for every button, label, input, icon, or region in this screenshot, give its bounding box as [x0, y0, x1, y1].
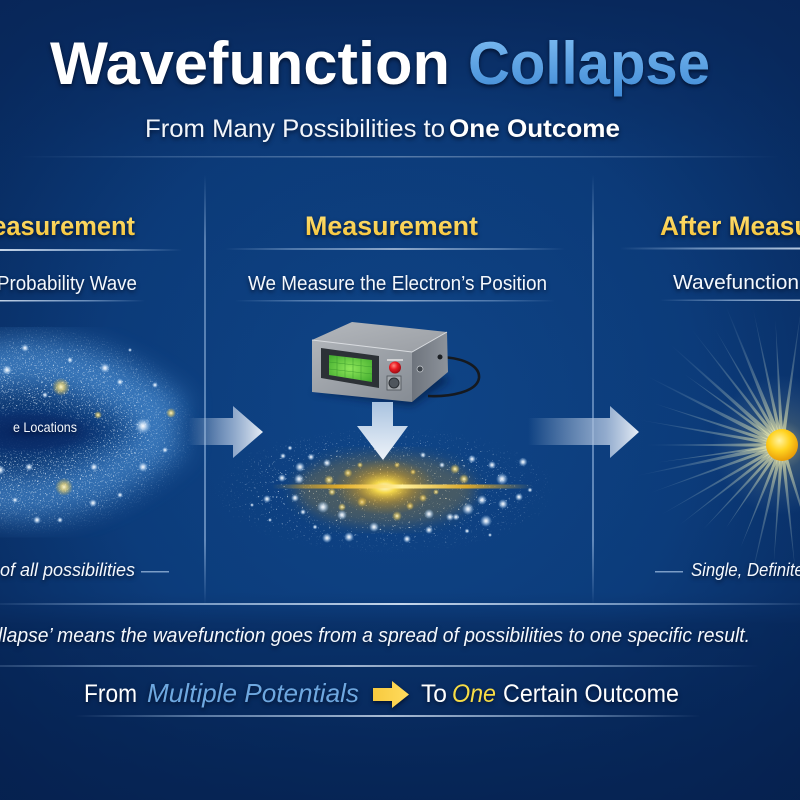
summary line: Certain Outcome [503, 680, 679, 708]
caption: all possibilities: of all possibilities [0, 560, 135, 580]
summary line [84, 678, 679, 708]
subtitle [145, 115, 620, 143]
title: Wavefunction [50, 30, 450, 97]
subheading: measure position: We Measure the Electron’s Position [248, 273, 547, 295]
subtitle: One Outcome [449, 115, 620, 143]
summary line: From [84, 680, 137, 708]
caption: single definite result [655, 571, 683, 572]
icon: single point with rays [634, 291, 800, 587]
title [50, 30, 710, 97]
arrow: measurement to after [528, 406, 639, 458]
title: Collapse [468, 30, 710, 97]
subheading: probability wave: Probability Wave [0, 273, 137, 295]
arrow: device to particles [357, 402, 408, 460]
icon: yellow arrow [373, 681, 409, 708]
arrow: before to measurement [188, 406, 263, 458]
label: locations: e Locations [13, 419, 77, 435]
chart: collapsing particles [213, 426, 557, 554]
panel: after measurement [620, 211, 800, 587]
heading: measurement: Measurement [305, 211, 478, 241]
summary line: To [421, 680, 447, 708]
panel: before measurement [0, 211, 198, 580]
summary line: One [452, 680, 496, 708]
summary line: Multiple Potentials [147, 678, 359, 708]
explanation text: llapse’ means the wavefunction goes from a spread of possibilities to one specific result. [0, 625, 750, 647]
chart: probability cloud [0, 324, 198, 536]
panel: measurement [213, 211, 565, 554]
subtitle: From Many Possibilities to [145, 115, 445, 143]
icon: measuring device [312, 322, 479, 406]
